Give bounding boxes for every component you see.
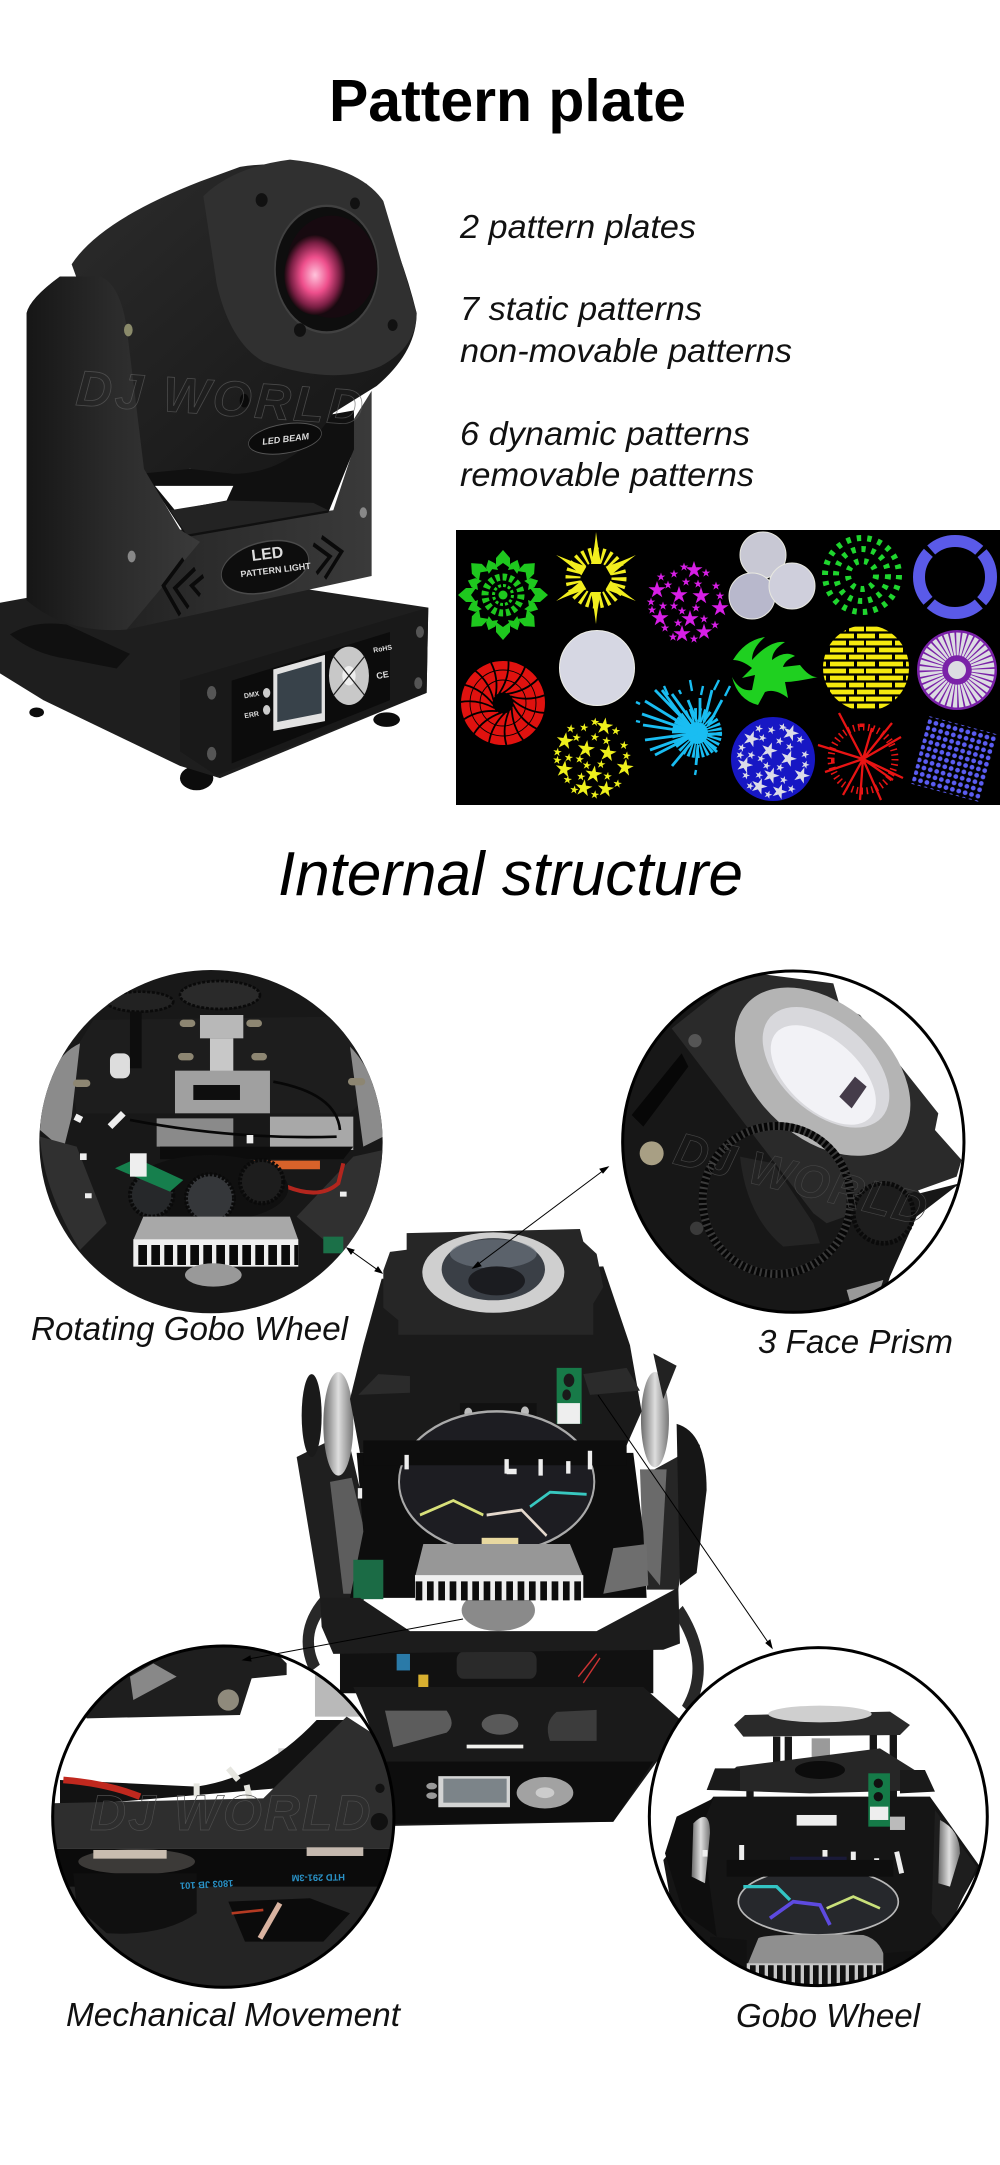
screws xyxy=(640,1141,664,1165)
cable ties xyxy=(360,1451,590,1498)
lower side panels xyxy=(40,1137,383,1257)
top gears xyxy=(107,981,260,1012)
side arms xyxy=(297,1353,707,1610)
caption: Rotating Gobo Wheel: Rotating Gobo Wheel xyxy=(31,1310,350,1347)
lower electronics bay xyxy=(340,1648,653,1693)
plate xyxy=(672,972,962,1223)
title: Pattern plate: Pattern plate xyxy=(329,68,686,134)
plate screws xyxy=(77,1023,362,1083)
fixture badge text: CE xyxy=(375,669,390,681)
stepper motor xyxy=(460,1403,537,1540)
pattern: three white circles xyxy=(729,532,815,619)
lower pulley xyxy=(73,1873,197,1934)
fixture rotating head xyxy=(72,160,417,474)
motor connector xyxy=(797,1815,837,1826)
pattern: yellow stars xyxy=(547,711,640,803)
belt text xyxy=(180,1872,345,1891)
body background xyxy=(663,1797,980,1990)
silver ring xyxy=(734,988,910,1156)
arrow: 3 face prism xyxy=(473,1167,608,1268)
fixture badge text: LED BEAM xyxy=(262,431,310,447)
left circuit board xyxy=(353,1560,383,1599)
gobo wheel xyxy=(363,1411,627,1552)
pattern: red burst xyxy=(818,713,903,800)
lens xyxy=(762,1007,890,1128)
base housing with display xyxy=(353,1687,683,1826)
pattern: green triangles xyxy=(825,538,899,612)
belt zone xyxy=(57,1848,390,1887)
gobo wheel xyxy=(727,1860,898,1935)
screws xyxy=(371,1813,388,1830)
fixture badge text: RoHS xyxy=(373,644,393,655)
fixture badge text xyxy=(240,431,393,720)
wire bundle xyxy=(60,1720,347,1807)
heat sink xyxy=(747,1935,887,1987)
base yoke loops xyxy=(308,1598,698,1710)
upper mounting plate xyxy=(328,1016,348,1038)
embossed watermark: DJ WORLD xyxy=(669,1123,934,1236)
pattern: blue star disc xyxy=(725,710,824,809)
pulleys xyxy=(78,1847,363,1874)
pattern: magenta stars xyxy=(647,561,729,643)
yoke bar xyxy=(50,1717,403,1848)
bottom silver hub xyxy=(185,1263,242,1287)
green sensor board xyxy=(115,1158,183,1192)
callout circle: gobo wheel xyxy=(649,1648,987,1990)
silver blocks xyxy=(157,1118,233,1147)
upper black housing xyxy=(350,1266,642,1453)
inner cavity xyxy=(350,1453,647,1598)
arrow: gobo wheel xyxy=(598,1395,772,1648)
gear ring xyxy=(703,1126,913,1274)
arrows xyxy=(243,1167,772,1661)
wires xyxy=(130,1082,340,1137)
silver wall xyxy=(315,1674,360,1717)
dark shelf xyxy=(160,1147,353,1159)
right side motor block xyxy=(603,1544,648,1594)
fixture badge text: ERR xyxy=(244,711,260,720)
fixture badge text: DMX xyxy=(243,691,260,700)
central internal structure photo xyxy=(297,1229,707,1826)
arrow: mechanical movement xyxy=(243,1619,463,1661)
fixture badge text: LED xyxy=(251,544,284,565)
lower yoke bar xyxy=(320,1588,680,1654)
side walls xyxy=(40,1043,383,1150)
fixture badge text: PATTERN LIGHT xyxy=(240,561,312,579)
arrow: rotating gobo wheel xyxy=(347,1248,382,1273)
pattern: white disc xyxy=(560,630,634,706)
top lens plate xyxy=(383,1229,603,1335)
lower corners xyxy=(710,1937,923,1990)
callout circle: 3 face prism xyxy=(621,970,966,1314)
caption: Mechanical Movement: Mechanical Movement xyxy=(66,1996,402,2033)
fixture yoke xyxy=(27,276,372,630)
pattern: blue dot grid xyxy=(911,716,997,802)
mounting brackets xyxy=(358,1368,640,1395)
caption: 3 Face Prism: 3 Face Prism xyxy=(758,1323,953,1360)
sensor board xyxy=(868,1773,905,1830)
heat sink xyxy=(133,1217,298,1267)
lower clear part xyxy=(847,1280,883,1302)
callout circle: rotating gobo wheel xyxy=(39,970,383,1313)
gear disc xyxy=(128,1160,288,1216)
upper bracket xyxy=(86,1648,287,1718)
silver hub xyxy=(462,1590,535,1631)
fixture base xyxy=(0,588,428,790)
pattern: green flower xyxy=(458,550,548,640)
panel: gobo pattern collage xyxy=(456,530,1000,809)
heat sink xyxy=(415,1544,583,1600)
dark slot xyxy=(632,1053,688,1127)
pattern: red spiral wheel xyxy=(461,661,545,745)
feature list text xyxy=(459,209,792,494)
callout circle: mechanical movement xyxy=(51,1644,396,1989)
feature list text: 7 static patterns xyxy=(460,291,702,328)
cable ties xyxy=(75,1113,343,1198)
fixture watermark: DJ WORLD xyxy=(74,360,368,436)
pattern: purple disc xyxy=(917,630,997,710)
pattern: blue ring xyxy=(919,541,991,613)
feature list text: 2 pattern plates xyxy=(459,209,696,246)
mid plate xyxy=(707,1748,935,1793)
pattern: green flames xyxy=(732,637,818,705)
feature list text: non-movable patterns xyxy=(460,333,792,370)
dark body xyxy=(624,988,957,1311)
sensor board xyxy=(557,1368,582,1424)
heading: Internal structure: Internal structure xyxy=(278,840,743,909)
pattern: yellow stripes xyxy=(820,629,910,706)
shaft and pulley xyxy=(110,1012,243,1078)
orange tube xyxy=(254,1160,320,1170)
fixture left arm xyxy=(27,276,200,630)
stepper motor xyxy=(175,1071,270,1113)
opening with wires xyxy=(228,1898,350,1942)
cable ties xyxy=(705,1845,902,1873)
bottom plate xyxy=(70,1886,377,1986)
pattern: cyan burst xyxy=(636,680,730,775)
moving head light fixture photo xyxy=(0,160,428,790)
belt text: HTD 291-3M xyxy=(291,1872,345,1883)
pattern: yellow starburst xyxy=(554,532,638,624)
motor blue base xyxy=(790,1857,847,1880)
belt text: 1803 JB 101 xyxy=(180,1878,234,1891)
embossed watermark: DJ WORLD xyxy=(90,1785,373,1841)
feature list text: removable patterns xyxy=(460,457,754,494)
feature list text: 6 dynamic patterns xyxy=(460,416,750,453)
side arms xyxy=(665,1798,977,1937)
silver shaft xyxy=(812,1738,830,1762)
columns xyxy=(750,1735,893,1833)
caption: Gobo Wheel: Gobo Wheel xyxy=(736,1997,922,2034)
top plate xyxy=(734,1706,910,1737)
